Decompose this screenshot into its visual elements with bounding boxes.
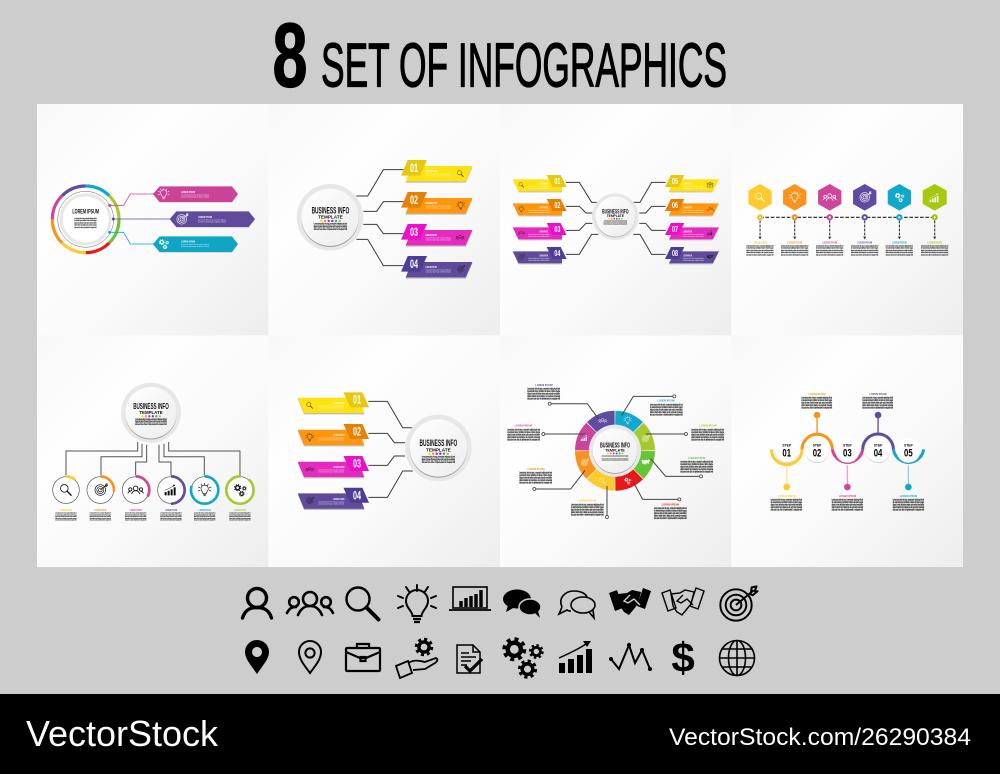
- panel 5: organisation tree with progress rings: [37, 335, 269, 567]
- right tabs 05 to 08: LOREM IPSUM: [683, 205, 692, 209]
- label: orange: [801, 392, 833, 409]
- bar: purple: [170, 211, 255, 228]
- label: magenta: LOREM IPSUM: [515, 424, 533, 428]
- step 4: LOREM IPSUM: [857, 241, 873, 245]
- step 05: 05: [904, 447, 913, 459]
- bar: cyan: LOREM IPSUM: [181, 240, 196, 244]
- label: yellow: [771, 494, 802, 511]
- right tabs 05 to 08: [665, 175, 719, 264]
- step 03: 03: [843, 447, 852, 459]
- label: yellow: LOREM IPSUM: [778, 494, 796, 498]
- left tabs 01 to 04: 04: [554, 248, 561, 258]
- footer image id: VectorStock.com/26290384: [669, 724, 971, 751]
- left tabs 01 to 04: [513, 175, 567, 264]
- step 3: [816, 184, 844, 256]
- label: orange: LOREM IPSUM: [808, 392, 826, 396]
- label: magenta: LOREM IPSUM: [839, 494, 857, 498]
- label: cyan: LOREM IPSUM: [657, 399, 675, 403]
- connector lines: [566, 182, 666, 254]
- tab 03: [401, 224, 472, 247]
- icon: magnifier: [346, 588, 378, 620]
- step 01: [775, 438, 799, 463]
- step 4: [851, 184, 879, 256]
- label: yellow: [571, 499, 604, 516]
- footer logo: VectorStock: [26, 713, 219, 754]
- icon: globe: [720, 640, 754, 676]
- step 5: [886, 184, 913, 256]
- step 1: [746, 184, 774, 256]
- tab 01: 01: [353, 394, 361, 407]
- tab 03: 03: [353, 457, 361, 470]
- step 03: STEP: [843, 442, 852, 447]
- tab 04: 04: [353, 489, 361, 502]
- label: cyan: [650, 399, 683, 416]
- ring 2: target: LOREM IPSUM: [94, 508, 107, 512]
- tab 04: [401, 256, 472, 279]
- ring 2: target: [87, 476, 114, 522]
- tab 02: LOREM IPSUM: [333, 433, 345, 437]
- icon: document with check: [457, 645, 482, 673]
- tab 01: [401, 160, 472, 183]
- label: magenta: [507, 424, 540, 441]
- step 03: [835, 438, 859, 463]
- centre disc: [405, 415, 472, 481]
- tab 02: 02: [353, 425, 361, 438]
- connector lines: [356, 170, 403, 266]
- step 04: 04: [874, 447, 883, 459]
- wave arcs: [771, 434, 924, 465]
- step 01: STEP: [782, 442, 791, 447]
- panel 2: business info with four numbered tabs on right: [268, 104, 500, 336]
- label: purple: LOREM IPSUM: [535, 383, 553, 387]
- tab 02: [298, 424, 369, 446]
- tab 03: LOREM IPSUM: [333, 465, 345, 469]
- ring 5: bulb: LOREM IPSUM: [199, 508, 211, 512]
- label: cyan: LOREM IPSUM: [900, 494, 918, 498]
- panel 1: circle with three arrow bars: [37, 104, 269, 336]
- left tabs 01 to 04: LOREM IPSUM: [539, 205, 548, 209]
- label: magenta: [832, 494, 863, 511]
- label: red: [654, 502, 687, 520]
- step 02: STEP: [813, 442, 822, 447]
- step 01: 01: [782, 447, 791, 459]
- icon: solid handshake: [609, 588, 651, 615]
- connector lines: [368, 401, 413, 497]
- label: green: LOREM IPSUM: [688, 456, 706, 460]
- step 6: [921, 184, 949, 256]
- tab 03: [298, 456, 369, 478]
- right tabs 05 to 08: LOREM IPSUM: [683, 253, 692, 257]
- wheel segments: [568, 404, 662, 497]
- label: purple: LOREM IPSUM: [869, 392, 887, 396]
- step 02: 02: [813, 447, 821, 459]
- icon: light bulb: [398, 585, 436, 622]
- icon: solid map pin: [245, 640, 269, 674]
- icon: zigzag line: [609, 643, 652, 671]
- icon: laptop chart: [449, 587, 491, 610]
- ring 6: gears: LOREM IPSUM: [234, 508, 246, 512]
- multicolour ring: [39, 172, 133, 266]
- leader lines: [533, 395, 702, 519]
- label: purple: [527, 383, 560, 401]
- icon: briefcase: [346, 644, 380, 671]
- step 02: [805, 438, 829, 463]
- icon: growth chart: [559, 641, 592, 673]
- icon: outline speech bubbles: [559, 591, 595, 618]
- bar: magenta: [153, 186, 238, 203]
- bar: magenta: LOREM IPSUM: [181, 190, 196, 194]
- label: purple: [862, 392, 893, 409]
- step 5: LOREM IPSUM: [892, 241, 907, 245]
- step 2: [781, 184, 809, 256]
- step 3: LOREM IPSUM: [822, 241, 838, 245]
- dashed timeline: [760, 216, 935, 219]
- step 6: LOREM IPSUM: [927, 241, 943, 245]
- ring 4: chart: [157, 476, 185, 522]
- icon: outline handshake: [662, 588, 704, 615]
- centre disc with text: [58, 191, 114, 247]
- tab 03: LOREM IPSUM: [425, 233, 437, 237]
- tab 02: 02: [410, 194, 418, 207]
- connector lines: [108, 194, 170, 244]
- tab 04: LOREM IPSUM: [425, 265, 437, 269]
- icon: user: [242, 588, 272, 618]
- label: orange: [519, 467, 552, 485]
- left tabs 01 to 04: 01: [554, 176, 561, 186]
- stems and dots: [783, 412, 912, 490]
- ring 4: chart: LOREM IPSUM: [165, 508, 177, 512]
- icon: outline map pin: [299, 641, 321, 673]
- ring 3: people: LOREM IPSUM: [130, 508, 142, 512]
- right tabs 05 to 08: 06: [672, 200, 678, 210]
- centre disc with text: LOREM IPSUM: [72, 210, 99, 216]
- footer bar: [0, 694, 1000, 774]
- centre disc: [121, 383, 181, 443]
- centre disc: [592, 193, 639, 240]
- icon: group: [287, 592, 333, 615]
- ring 1: search: [52, 476, 80, 522]
- title: 8: [272, 6, 308, 106]
- label: lime: LOREM IPSUM: [699, 424, 717, 428]
- label: red: LOREM IPSUM: [662, 502, 680, 506]
- panel 3: eight tabs around centre disc: [500, 104, 732, 336]
- step 04: STEP: [874, 442, 883, 447]
- label: yellow: LOREM IPSUM: [579, 499, 597, 503]
- connector lines: [66, 442, 240, 475]
- panel 8: five-step wave: [731, 335, 963, 567]
- ring 5: bulb: [191, 476, 218, 522]
- tab 02: [401, 192, 472, 215]
- tab 01: [298, 392, 369, 414]
- left tabs 01 to 04: 02: [554, 200, 561, 210]
- left tabs 01 to 04: LOREM IPSUM: [539, 181, 548, 185]
- step 1: LOREM IPSUM: [753, 241, 768, 245]
- bar: cyan: [153, 236, 238, 253]
- label: orange: LOREM IPSUM: [527, 467, 545, 471]
- step 05: [896, 438, 920, 463]
- label: green: [680, 456, 713, 474]
- icon: solid speech bubbles: [503, 590, 541, 618]
- icon: hand with gear: [396, 639, 437, 678]
- right tabs 05 to 08: 08: [672, 248, 678, 258]
- ring 6: gears: [221, 471, 259, 522]
- left tabs 01 to 04: 03: [554, 224, 561, 234]
- tab 01: LOREM IPSUM: [425, 169, 437, 173]
- step 05: STEP: [904, 442, 913, 447]
- panel 7: segmented wheel: [500, 335, 732, 567]
- right tabs 05 to 08: LOREM IPSUM: [683, 229, 692, 233]
- left tabs 01 to 04: LOREM IPSUM: [539, 253, 548, 257]
- icon: dollar: $: [671, 634, 695, 681]
- panel 6: four numbered tabs on left with disc: [268, 335, 500, 567]
- centre disc: [297, 184, 363, 251]
- tab 04: [298, 488, 369, 510]
- ring 1: search: LOREM IPSUM: [60, 508, 72, 512]
- tab 01: 01: [410, 162, 418, 175]
- icon: gears: [504, 639, 543, 677]
- tab 02: LOREM IPSUM: [425, 201, 437, 205]
- tab 04: 04: [410, 258, 418, 271]
- right tabs 05 to 08: LOREM IPSUM: [683, 181, 692, 185]
- centre disc: [589, 425, 641, 477]
- label: cyan: [893, 494, 924, 511]
- tab 04: LOREM IPSUM: [333, 497, 345, 501]
- panel 4: hexagon timeline: [731, 104, 963, 336]
- tab 03: 03: [410, 226, 418, 239]
- tab 01: LOREM IPSUM: [333, 401, 345, 405]
- bar: purple: LOREM IPSUM: [198, 215, 213, 219]
- step 2: LOREM IPSUM: [787, 241, 803, 245]
- ring 3: people: [122, 476, 149, 522]
- wheel icons: [581, 416, 650, 484]
- right tabs 05 to 08: 05: [672, 176, 678, 186]
- title: [272, 6, 727, 106]
- label: lime: [691, 424, 724, 441]
- left tabs 01 to 04: LOREM IPSUM: [539, 229, 548, 233]
- step 04: [866, 438, 890, 463]
- icon: target: [720, 586, 758, 621]
- right tabs 05 to 08: 07: [672, 224, 678, 234]
